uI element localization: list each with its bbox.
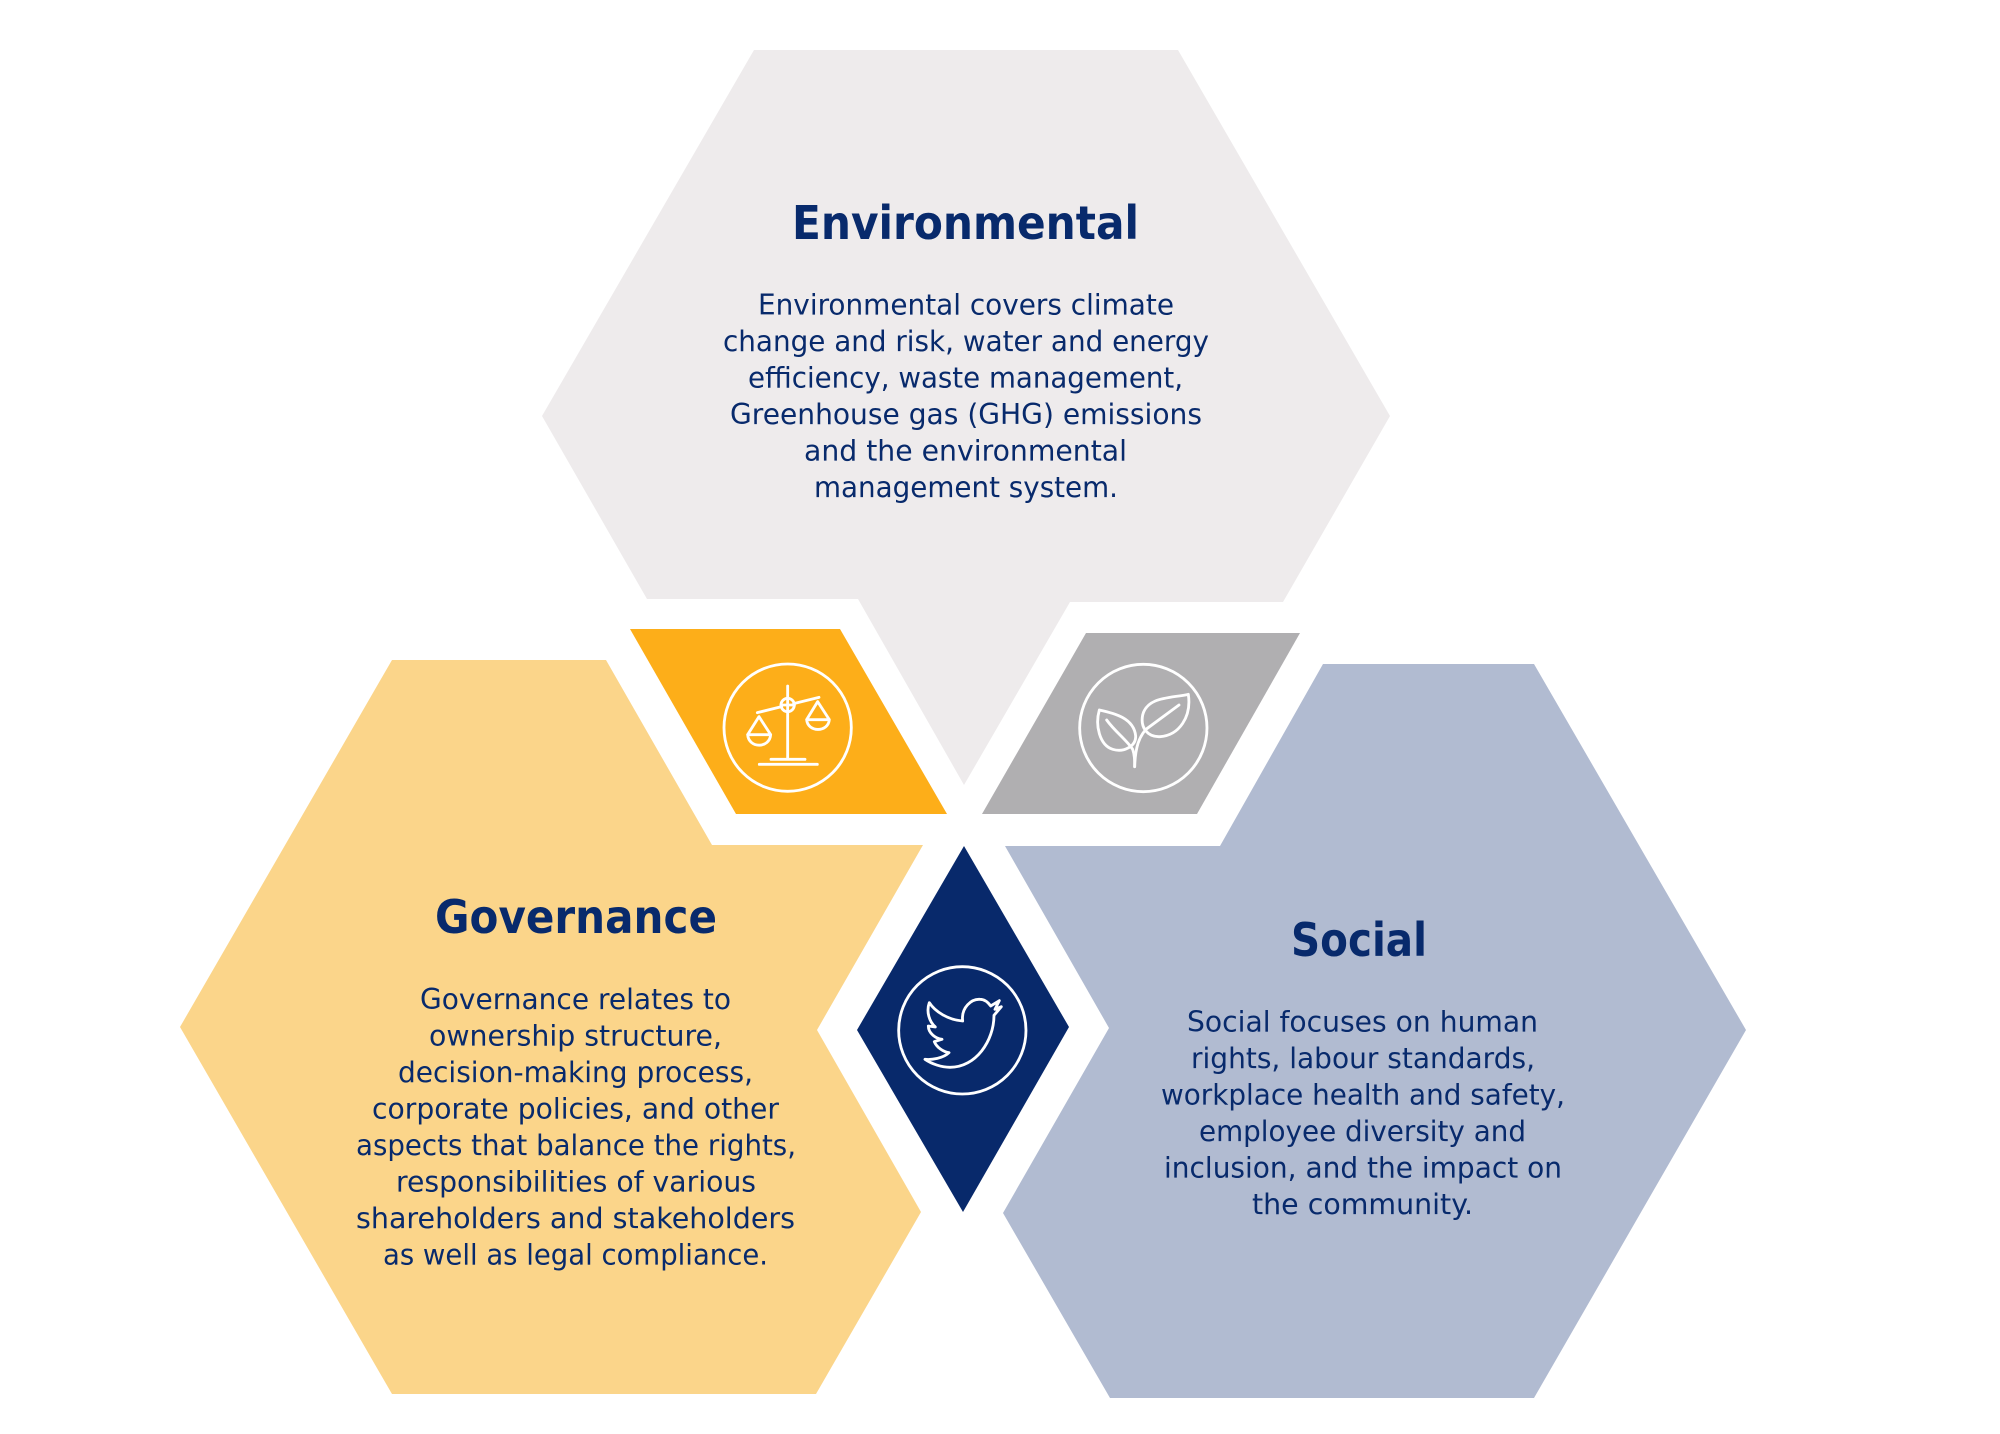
text: environmental description: change and risk, water and energy — [723, 325, 1209, 358]
text: governance description: Governance relates to — [420, 983, 731, 1016]
text: governance description — [356, 983, 796, 1272]
text: environmental description — [723, 288, 1209, 504]
icon: plant leaves — [1080, 664, 1207, 792]
text: social description — [1161, 1006, 1565, 1221]
text: social description: Social focuses on human — [1187, 1006, 1538, 1038]
text: environmental description: Greenhouse gas (GHG) emissions — [730, 398, 1202, 431]
text: governance description: aspects that balance the rights, — [356, 1129, 796, 1162]
text: social description: the community. — [1252, 1188, 1473, 1221]
gray parallelogram with leaf icon — [982, 633, 1300, 814]
text: governance description: shareholders and stakeholders — [356, 1202, 795, 1235]
icon: balance scales — [724, 664, 851, 791]
text: governance description: decision-making process, — [398, 1056, 753, 1089]
environmental hexagon — [542, 50, 1390, 785]
social hexagon — [1003, 664, 1746, 1398]
panel: social — [1003, 664, 1746, 1398]
heading: Governance: Governance — [435, 890, 717, 944]
text: social description: employee diversity and — [1199, 1115, 1526, 1148]
heading: Social: Social — [1291, 913, 1427, 967]
icon: twitter bird — [899, 967, 1026, 1094]
amber parallelogram with scales icon — [630, 629, 947, 814]
governance hexagon — [180, 660, 923, 1394]
panel: governance — [180, 660, 923, 1394]
text: environmental description: management system. — [814, 471, 1118, 504]
panel: environmental — [542, 50, 1390, 785]
heading: Environmental: Environmental — [792, 196, 1139, 250]
text: governance description: responsibilities of various — [396, 1166, 756, 1198]
text: social description: inclusion, and the impact on — [1164, 1152, 1562, 1184]
text: social description: workplace health and safety, — [1161, 1078, 1565, 1112]
text: social description: rights, labour standards, — [1191, 1042, 1535, 1075]
text: environmental description: Environmental covers climate — [758, 288, 1174, 322]
text: governance description: as well as legal compliance. — [383, 1238, 768, 1272]
text: environmental description: efficiency, waste management, — [748, 362, 1183, 394]
text: environmental description: and the environmental — [804, 434, 1127, 468]
text: governance description: corporate policies, and other — [372, 1092, 779, 1126]
navy diamond with bird icon — [857, 846, 1069, 1212]
text: governance description: ownership structure, — [429, 1020, 722, 1052]
